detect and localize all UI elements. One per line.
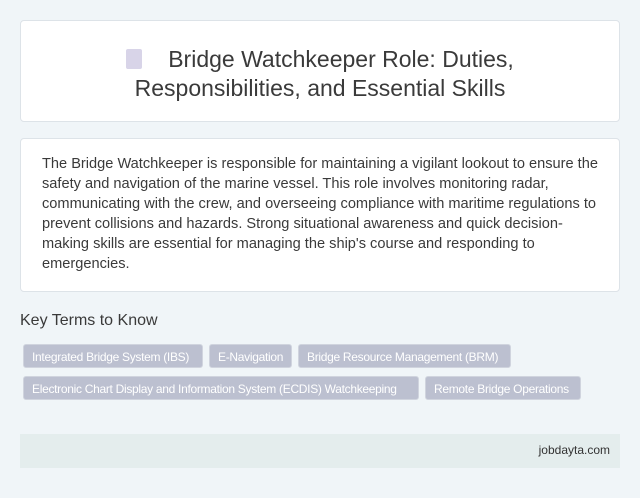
tag — [23, 376, 419, 400]
tag — [209, 344, 292, 368]
description text: The Bridge Watchkeeper is responsible for maintaining a vigilant lookout to ensure the safety and navigation of the marine vessel. This role involves monitoring radar, communicating with the crew, and overseeing compliance with maritime regulations to prevent collisions and hazards. Strong situational awareness and quick decision-making skills are essential for managing the ship's course and responding to emergencies. — [42, 156, 598, 272]
footer text: jobdayta.com — [539, 443, 610, 457]
tag: Integrated Bridge System (IBS) — [32, 350, 189, 364]
title: Bridge Watchkeeper Role: Duties, — [168, 46, 514, 72]
tag — [298, 344, 511, 368]
tag — [425, 376, 581, 400]
description card — [20, 138, 620, 292]
footer — [20, 434, 620, 468]
tag: Electronic Chart Display and Information System (ECDIS) Watchkeeping — [32, 382, 397, 396]
tag — [23, 344, 203, 368]
header card — [20, 20, 620, 122]
heading: key terms: Key Terms to Know — [20, 312, 158, 329]
tag: Remote Bridge Operations — [434, 382, 569, 396]
tag: E-Navigation — [218, 350, 283, 364]
title — [126, 46, 514, 101]
tag: Bridge Resource Management (BRM) — [307, 350, 498, 364]
icon: document — [126, 49, 142, 69]
title: Responsibilities, and Essential Skills — [135, 75, 505, 101]
